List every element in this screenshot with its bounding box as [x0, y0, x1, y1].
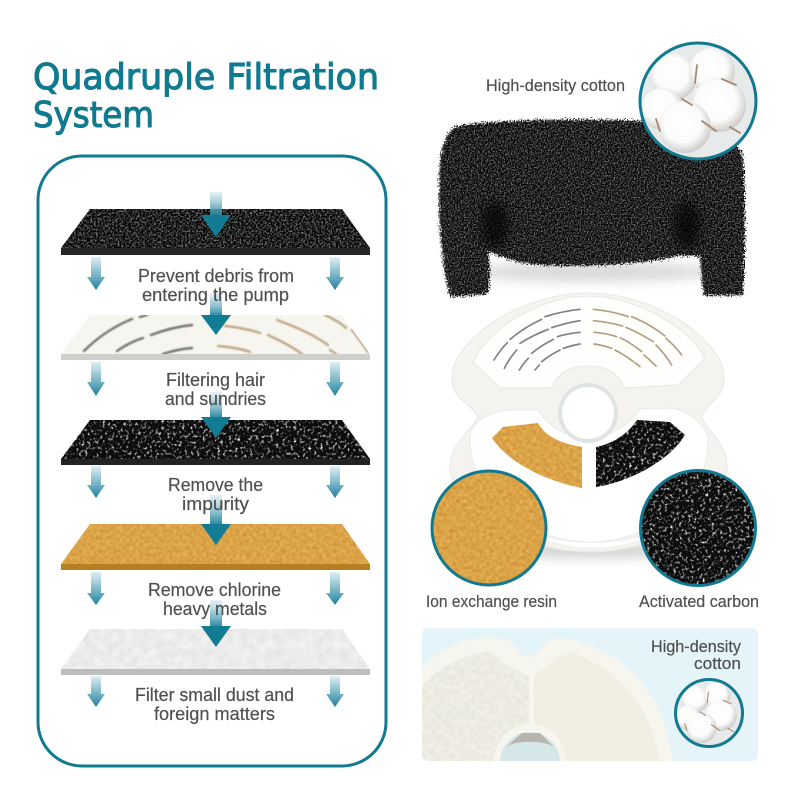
- label: high-density cotton: [651, 637, 741, 673]
- label: high-density cotton top: High-density cotton: [486, 76, 625, 95]
- layer 1: black sponge: [60, 208, 372, 255]
- cartridge cotton lip: [535, 533, 650, 547]
- inset: resin: [430, 470, 548, 588]
- cartridge hole: [558, 383, 618, 443]
- text: dust: foreign matters: [154, 704, 275, 724]
- foam shadows: [481, 201, 701, 249]
- text: hair: Filtering hair: [166, 370, 265, 390]
- foam sponge: [439, 119, 745, 297]
- arrow: centre 3: [201, 392, 231, 438]
- carbon window: [596, 420, 685, 487]
- cartridge dome: [473, 296, 705, 388]
- text: chlorine: heavy metals: [163, 599, 267, 619]
- label: activated carbon: Activated carbon: [639, 592, 759, 611]
- layer 3: activated carbon: [60, 419, 372, 465]
- cartridge slots: [494, 309, 682, 370]
- layer 2: white perforated plate: [61, 315, 370, 360]
- cartridge lower tray: [470, 408, 708, 542]
- label: ion exchange resin: Ion exchange resin: [426, 592, 557, 611]
- text: chlorine: Remove chlorine: [148, 580, 281, 600]
- title: System: [33, 95, 154, 136]
- arrows: row 1: [87, 257, 344, 290]
- text: hair: [165, 370, 266, 409]
- arrows: row 4: [87, 572, 344, 605]
- text: impurity: Remove the: [168, 475, 263, 495]
- title: [33, 57, 379, 136]
- text: debris: [138, 266, 294, 305]
- title: Quadruple Filtration: [33, 57, 379, 98]
- text: dust: Filter small dust and: [135, 685, 294, 705]
- text: chlorine: [148, 580, 281, 619]
- panel: cotton pad: [422, 628, 758, 761]
- text: debris: entering the pump: [142, 285, 289, 305]
- text: impurity: [168, 475, 263, 514]
- arrow: centre 2: [201, 293, 231, 335]
- inset: cotton bottom: [674, 678, 744, 748]
- panel: filtration layers: [38, 156, 386, 766]
- layer 4: ion exchange resin: [60, 523, 372, 570]
- cotton pad photo: [422, 638, 673, 761]
- text: impurity: impurity: [182, 494, 249, 514]
- arrows: row 3: [87, 466, 344, 498]
- text: dust: [135, 685, 294, 724]
- layer 5: white cotton: [60, 628, 372, 675]
- arrow: centre 4: [201, 495, 231, 545]
- arrow: centre 5: [201, 600, 231, 647]
- text: hair: and sundries: [165, 389, 266, 409]
- label: high-density cotton: High-density: [651, 637, 741, 656]
- filter cartridge: [450, 293, 727, 557]
- text: debris: Prevent debris from: [138, 266, 294, 286]
- resin window: [492, 423, 582, 488]
- arrows: row 5: [87, 676, 344, 707]
- label: high-density cotton: cotton: [694, 654, 741, 673]
- arrows: row 2: [87, 362, 344, 396]
- inset: activated carbon: [639, 470, 757, 588]
- inset: cotton top: [638, 41, 758, 161]
- arrow: centre 1: [201, 192, 231, 237]
